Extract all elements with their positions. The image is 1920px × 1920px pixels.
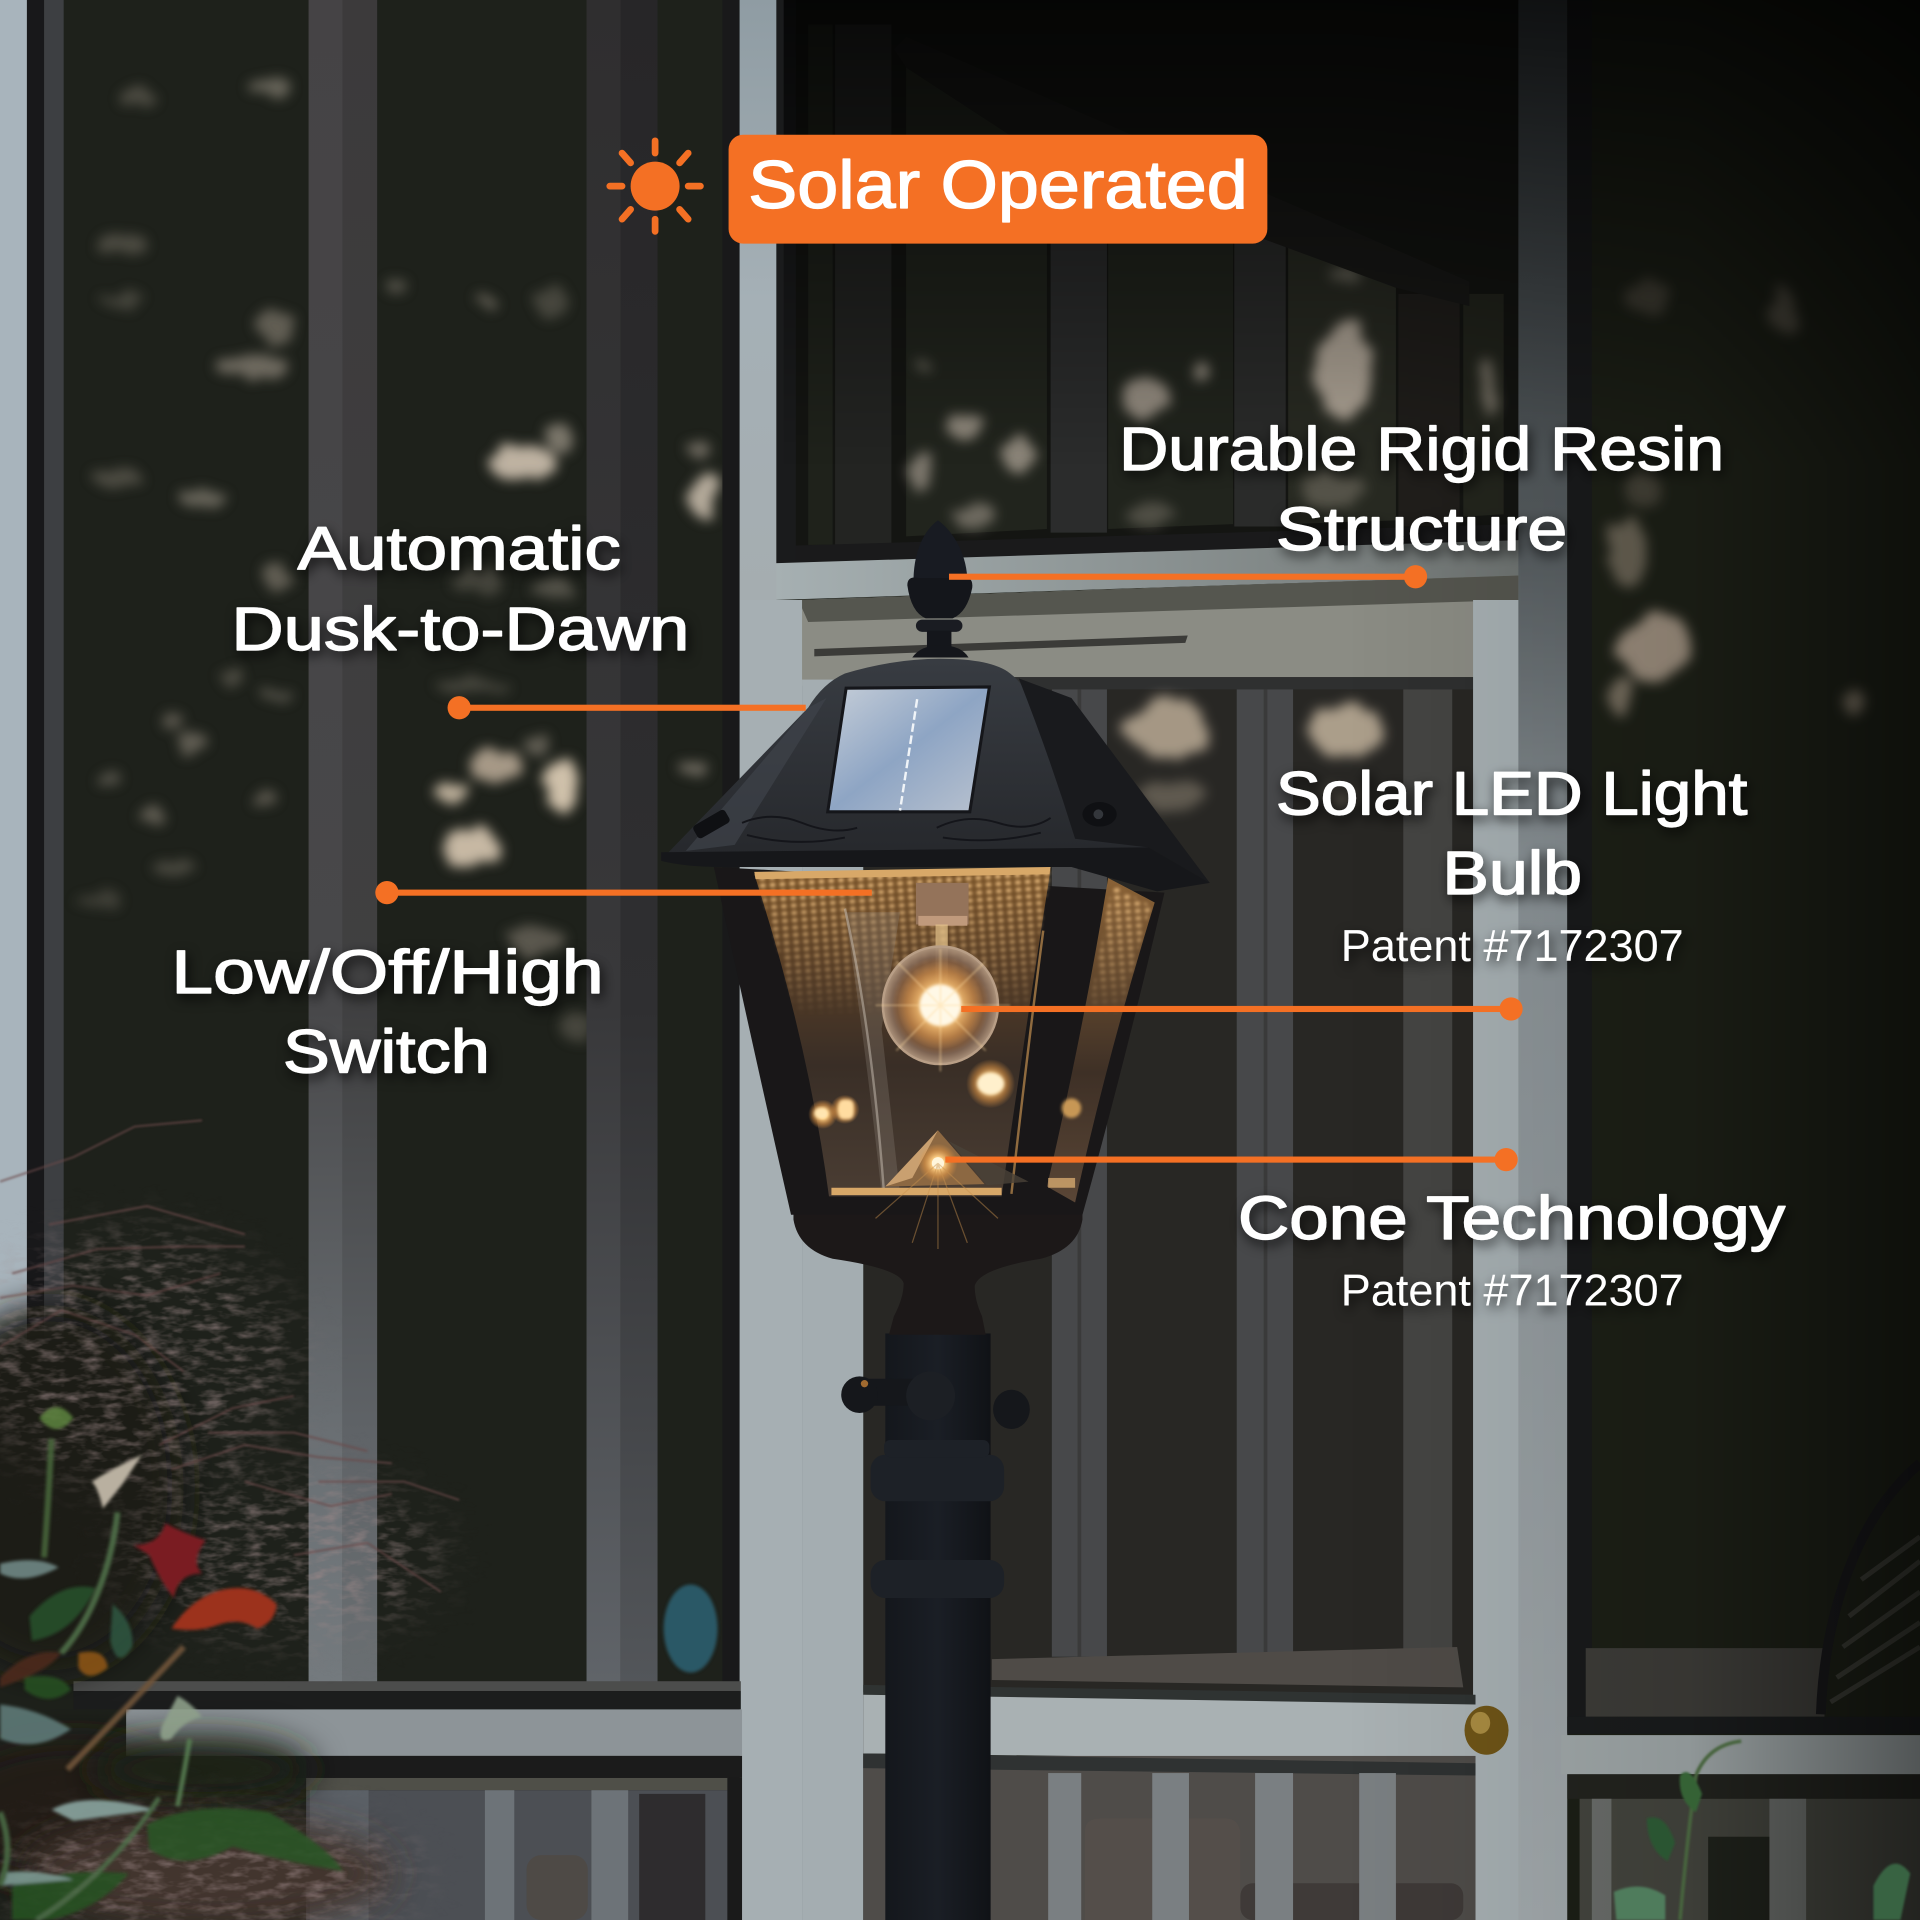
door transom and beam — [774, 540, 1524, 686]
icon: sun — [610, 141, 700, 231]
solar panel — [828, 687, 989, 812]
finial — [907, 520, 972, 658]
neck and base bowl — [793, 1212, 1082, 1335]
callout: Low/Off/High Switch — [171, 881, 872, 1086]
title badge: Solar Operated: Solar Operated — [748, 148, 1248, 223]
callout: Durable Rigid Resin Structure: Structure — [1276, 495, 1567, 563]
left ledge and lower railing — [0, 1584, 742, 1920]
pole collars — [871, 1440, 1004, 1598]
green leaves — [0, 1407, 343, 1920]
feathery maple texture — [0, 1237, 441, 1920]
pole shaft — [885, 1333, 991, 1920]
door rails and stiles — [802, 0, 1567, 1920]
side switch knobs — [841, 1371, 1030, 1429]
callout: Automatic Dusk-to-Dawn: Automatic — [298, 514, 621, 582]
callout: Automatic Dusk-to-Dawn — [231, 514, 806, 719]
lantern body — [714, 867, 1164, 1215]
callout: Solar LED Light Bulb: Bulb — [1442, 839, 1582, 907]
callout: Cone Technology: Cone Technology — [1238, 1184, 1786, 1252]
screen shadow vignette — [784, 0, 1920, 1920]
door knob — [1464, 1706, 1509, 1755]
callout: Solar LED Light Bulb: Solar LED Light — [1276, 759, 1747, 827]
red leaves — [92, 1455, 277, 1630]
callout: Low/Off/High Switch: Low/Off/High — [171, 938, 604, 1006]
callout: Cone Technology: Patent #7172307 — [1341, 1266, 1684, 1315]
plant bottom right — [1614, 1741, 1910, 1920]
callout: Solar LED Light Bulb — [961, 759, 1747, 1021]
maple branches — [0, 1120, 459, 1592]
right screen panel — [1561, 0, 1920, 1920]
lamp post — [661, 520, 1210, 1920]
callout: Durable Rigid Resin Structure — [949, 415, 1724, 588]
title badge: Solar Operated — [729, 135, 1267, 244]
front glass pane — [754, 867, 1051, 1196]
callout: Durable Rigid Resin Structure: Durable Rigid Resin — [1119, 415, 1724, 483]
led bulb with glow — [876, 883, 1010, 1071]
left mullions and posts — [0, 0, 802, 1920]
callout: Low/Off/High Switch: Switch — [283, 1018, 490, 1086]
reflected light points — [808, 1059, 1015, 1129]
callout: Solar LED Light Bulb: Patent #7172307 — [1341, 922, 1684, 971]
tree reflections in left screens — [73, 81, 718, 1043]
side glass pane — [1047, 878, 1155, 1202]
reflector cone — [876, 1130, 1029, 1249]
door screen panes — [863, 677, 1476, 1700]
scroll ornaments — [742, 817, 1051, 842]
top window block — [775, 0, 1528, 563]
callout: Cone Technology — [945, 1148, 1786, 1315]
foliage bottom left — [0, 1120, 459, 1920]
roof — [661, 659, 1210, 891]
callout: Automatic Dusk-to-Dawn: Dusk-to-Dawn — [231, 595, 689, 663]
